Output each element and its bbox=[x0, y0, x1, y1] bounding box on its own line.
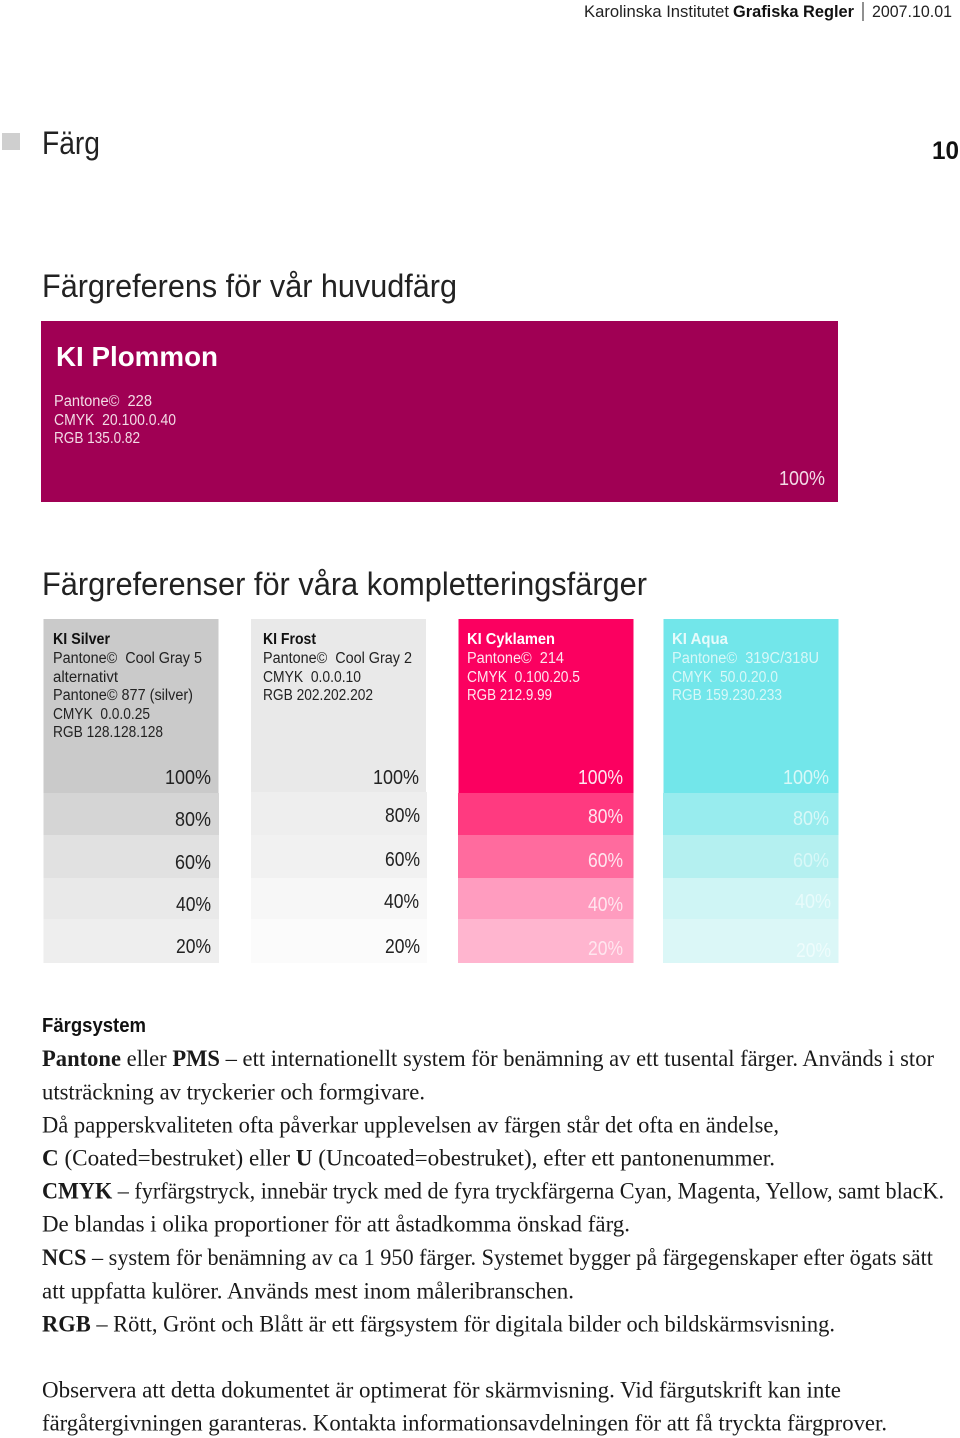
panel: KI Aqua: 80% bbox=[793, 808, 829, 830]
heading: main colour reference: Färgreferens för vår huvudfärg bbox=[42, 268, 457, 304]
panel: KI Cyklamen: 100% bbox=[578, 767, 623, 789]
page header: Grafiska Regler bbox=[733, 2, 854, 21]
panel: KI Frost: 60% bbox=[385, 849, 420, 871]
text block: colour systems: Pantone eller PMS – ett internationellt system för benämning av ett tusental färger. Används i stor bbox=[42, 1046, 934, 1071]
panel: KI Aqua bbox=[663, 619, 838, 963]
panel: KI Silver: RGB 128.128.128 bbox=[53, 724, 163, 741]
panel: KI Cyklamen: 40% bbox=[588, 894, 623, 916]
panel: KI Silver: 60% bbox=[175, 852, 211, 874]
panel: KI Silver: CMYK 0.0.0.25 bbox=[53, 706, 150, 723]
panel: KI Cyklamen bbox=[458, 619, 634, 963]
text block: colour systems bbox=[42, 1046, 944, 1337]
panel: KI Frost bbox=[251, 619, 427, 963]
panel: KI Silver: KI Silver bbox=[53, 631, 110, 648]
panel: KI Frost: 40% bbox=[384, 891, 419, 913]
text block: colour systems: CMYK – fyrfärgstryck, innebär tryck med de fyra tryckfärgerna Cyan, Magenta, Yellow, samt blacK. bbox=[42, 1179, 944, 1204]
panel: KI Plommon: RGB 135.0.82 bbox=[54, 430, 140, 447]
panel: KI Frost: 80% bbox=[385, 805, 420, 827]
page header: 2007.10.01 bbox=[872, 2, 952, 21]
panel: KI Frost: Pantone© Cool Gray 2 bbox=[263, 650, 412, 667]
panel: KI Aqua: 40% bbox=[795, 891, 831, 913]
text block: colour systems: att uppfatta kulörer. Används mest inom måleribranschen. bbox=[42, 1279, 574, 1304]
panel: KI Cyklamen: 80% bbox=[588, 806, 623, 828]
panel: KI Silver: 20% bbox=[176, 936, 211, 958]
panel: KI Cyklamen: 20% bbox=[588, 938, 623, 960]
heading: Färgsystem: Färgsystem bbox=[42, 1015, 146, 1037]
panel: KI Plommon bbox=[41, 321, 838, 502]
page header: Karolinska Institutet bbox=[584, 2, 729, 21]
page number: 10 bbox=[932, 137, 959, 165]
icon: section square bbox=[2, 133, 20, 150]
panel: KI Cyklamen: RGB 212.9.99 bbox=[467, 687, 552, 704]
text block: colour systems: De blandas i olika proportioner för att åstadkomma önskad färg. bbox=[42, 1212, 630, 1237]
panel: KI Cyklamen: KI Cyklamen bbox=[467, 631, 555, 648]
panel: KI Aqua: 20% bbox=[796, 940, 831, 962]
panel: KI Plommon: 100% bbox=[779, 468, 825, 490]
text block: colour systems: C (Coated=bestruket) eller U (Uncoated=obestruket), efter ett pantonenummer. bbox=[42, 1146, 775, 1171]
panel: KI Plommon: CMYK 20.100.0.40 bbox=[54, 412, 176, 429]
panel: KI Cyklamen: 60% bbox=[588, 850, 623, 872]
panel: KI Silver: alternativt bbox=[53, 669, 119, 686]
panel: KI Aqua: KI Aqua bbox=[672, 631, 728, 648]
panel: KI Aqua: RGB 159.230.233 bbox=[672, 687, 782, 704]
panel: KI Aqua: CMYK 50.0.20.0 bbox=[672, 669, 778, 686]
text block: colour systems: Då papperskvaliteten ofta påverkar upplevelsen av färgen står det ofta en ändelse, bbox=[42, 1113, 779, 1138]
text block: print note bbox=[42, 1378, 887, 1436]
page header bbox=[584, 2, 952, 21]
text block: colour systems: RGB – Rött, Grönt och Blått är ett färgsystem för digitala bilder och bildskärmsvisning. bbox=[42, 1312, 835, 1337]
text block: print note: färgåtergivningen garanteras. Kontakta informationsavdelningen för att få tryckta färgprover. bbox=[42, 1411, 887, 1436]
section title: Färg bbox=[42, 125, 100, 161]
panel: KI Silver: Pantone© Cool Gray 5 bbox=[53, 650, 202, 667]
panel: KI Frost: CMYK 0.0.0.10 bbox=[263, 669, 361, 686]
text block: colour systems: utsträckning av tryckerier och formgivare. bbox=[42, 1080, 425, 1105]
panel: KI Silver: 40% bbox=[176, 894, 211, 916]
panel: KI Frost: 100% bbox=[373, 767, 419, 789]
panel: KI Silver: Pantone© 877 (silver) bbox=[53, 687, 193, 704]
panel: KI Silver: 100% bbox=[165, 767, 211, 789]
panel: KI Cyklamen: Pantone© 214 bbox=[467, 650, 564, 667]
text block: print note: Observera att detta dokumentet är optimerat för skärmvisning. Vid färgutskrift kan inte bbox=[42, 1378, 841, 1403]
panel: KI Plommon: KI Plommon bbox=[56, 341, 218, 372]
panel: KI Plommon: Pantone© 228 bbox=[54, 393, 152, 410]
panel: KI Frost: RGB 202.202.202 bbox=[263, 687, 373, 704]
panel: KI Aqua: 100% bbox=[783, 767, 829, 789]
panel: KI Silver bbox=[44, 619, 219, 963]
text block: colour systems: NCS – system för benämning av ca 1 950 färger. Systemet bygger på färgegenskaper efter ögats sätt bbox=[42, 1245, 934, 1270]
panel: KI Aqua: Pantone© 319C/318U bbox=[672, 650, 819, 667]
panel: KI Cyklamen: CMYK 0.100.20.5 bbox=[467, 669, 580, 686]
panel: KI Frost: 20% bbox=[385, 936, 420, 958]
panel: KI Aqua: 60% bbox=[793, 850, 829, 872]
heading: complementary colours: Färgreferenser för våra kompletteringsfärger bbox=[42, 566, 647, 602]
panel: KI Frost: KI Frost bbox=[263, 631, 316, 648]
panel: KI Silver: 80% bbox=[175, 809, 211, 831]
